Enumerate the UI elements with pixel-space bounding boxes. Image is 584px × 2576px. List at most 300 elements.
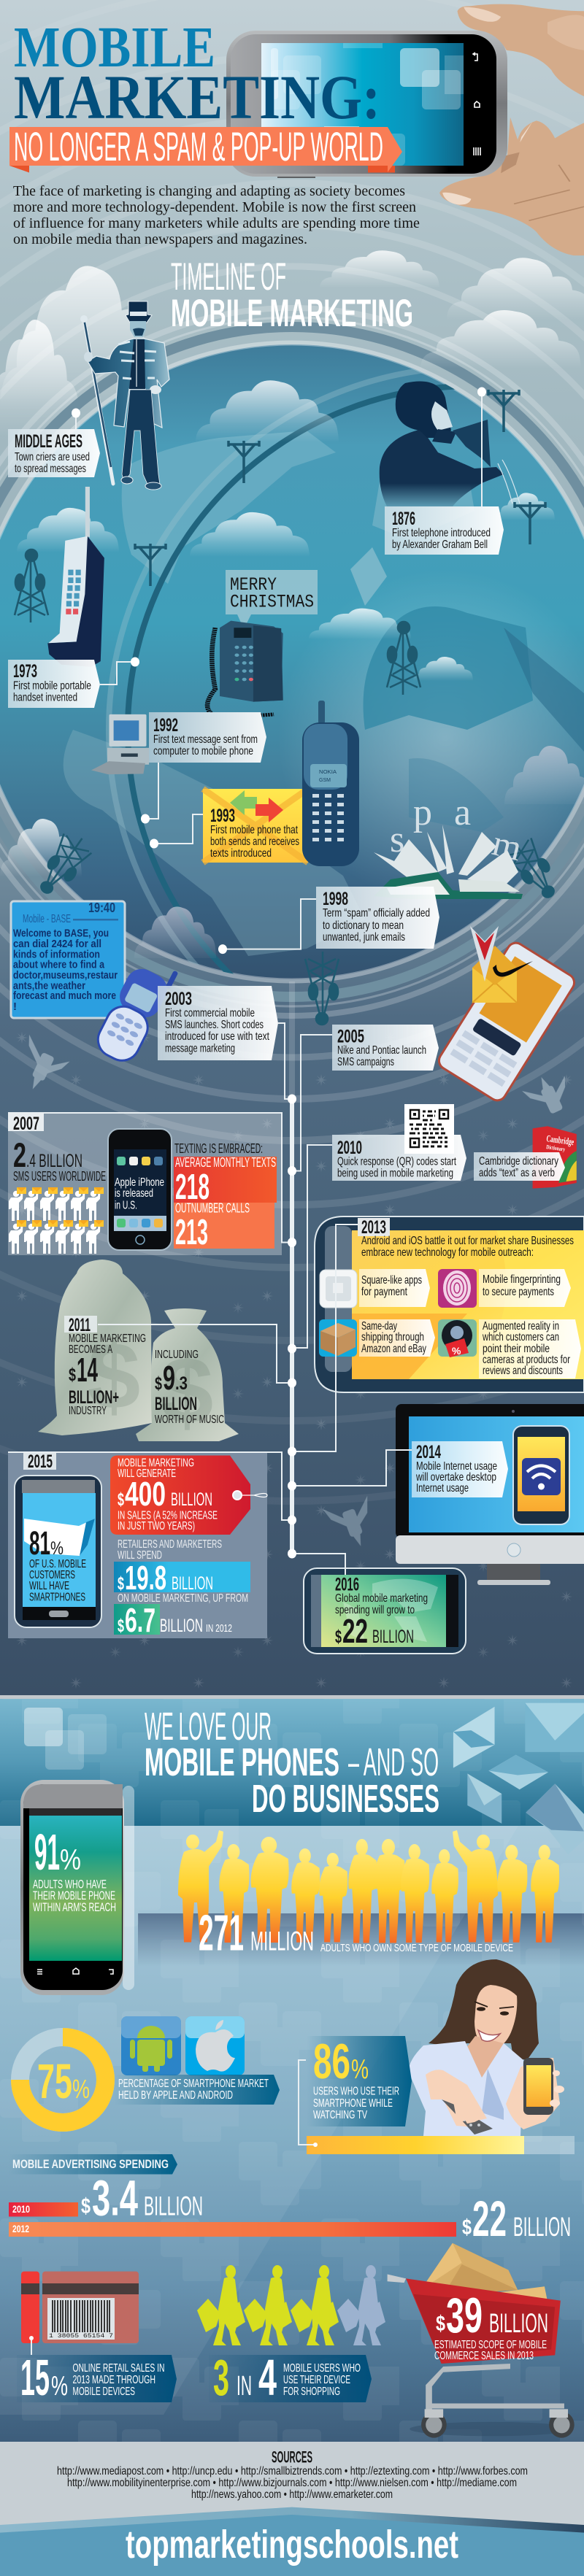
icon: blue flip phone [92, 953, 178, 1067]
text: 2011 stat: BECOMES A [69, 1343, 112, 1356]
text: augmented reality: point their mobile [483, 1343, 550, 1355]
icon: iPhone: in U.S. [115, 1200, 137, 1211]
marker line 15 percent [31, 2338, 32, 2355]
timeline dot 1998 [218, 944, 227, 954]
icon: smartphone 81%: SMARTPHONES [29, 1591, 85, 1604]
marker line 2011 [98, 1324, 292, 1383]
header: smartphone [226, 31, 507, 178]
timeline dot middle ages [72, 409, 80, 417]
text message screen: Welcome to BASE, you [13, 927, 109, 939]
speech bubble: merry christmas: CHRISTMAS [230, 591, 314, 613]
page background [0, 0, 584, 1695]
card: 1993: texts introduced [210, 847, 272, 860]
text: 2011 stat: 2011 [69, 1315, 91, 1335]
yellow bar [307, 2136, 575, 2154]
money bag left [38, 1260, 152, 1435]
stat: 15 percent: 15 [20, 2349, 50, 2406]
panel: desktop monitor 2014 [396, 1404, 584, 1585]
icon: android tile [121, 2016, 181, 2075]
icon: AR camera: % [452, 1345, 461, 1357]
intro paragraph [13, 183, 420, 247]
phone: 91 percent: % [60, 1844, 81, 1876]
phone: 91 percent: WITHIN ARM'S REACH [33, 1901, 116, 1914]
panel: 2007: TEXTING IS EMBRACED: [174, 1141, 263, 1156]
timeline dot 1876 [477, 387, 486, 397]
text message screen: kinds of information [13, 949, 100, 960]
stat: 15 percent [17, 2349, 177, 2406]
bar chart: advertising 2010: $ [81, 2194, 91, 2218]
price tag: 400 billion: MOBILE MARKETING [118, 1457, 194, 1470]
timeline dot 1993 [150, 839, 158, 848]
panel: 2016 phone: 2016 [335, 1575, 359, 1595]
stat: 3 in 4: USE THEIR DEVICE [283, 2374, 350, 2386]
timeline dot 2003 [288, 1095, 296, 1103]
stat: 3 in 4: MOBILE USERS WHO [283, 2362, 361, 2375]
icon: spam letters: p [413, 792, 432, 833]
globe [0, 340, 584, 984]
callout: 2005 [332, 1025, 439, 1071]
title: MOBILE [14, 16, 215, 80]
marker line 2003 [278, 1023, 292, 1099]
text: 2011 stat: 14 [77, 1351, 98, 1389]
stat: 3 in 4: FOR SHOPPING [283, 2386, 340, 2398]
darker clouds [134, 746, 584, 958]
icon: apple tile [185, 2016, 245, 2075]
price tag: 400 billion: $ [118, 1489, 124, 1510]
text message screen [11, 901, 125, 1018]
intro paragraph: of influence for many marketers while adults are spending more time [13, 215, 420, 231]
stat: 6.7 billion: $ [118, 1616, 124, 1636]
icon: card reader [320, 1270, 357, 1308]
callout: 1876: First telephone introduced [392, 527, 491, 539]
text message screen: can dial 2424 for all [13, 938, 101, 950]
footer with website: topmarketingschools.net [126, 2523, 458, 2567]
heading: timeline: MOBILE MARKETING [171, 292, 413, 335]
phone: 91 percent: 91 [34, 1824, 60, 1881]
icon: smartphone 81%: OF U.S. MOBILE [29, 1558, 86, 1570]
icon: open book [374, 825, 523, 899]
icon: iPhone: is released [115, 1187, 153, 1200]
sources panel [0, 2442, 584, 2576]
callout: 1998: to dictionary to mean [323, 919, 404, 932]
text message screen: ! [13, 1000, 17, 1013]
panel: 2015 [8, 1451, 292, 1639]
heading: we love our phones: DO BUSINESSES [252, 1777, 439, 1821]
title [14, 16, 380, 132]
callout: 2003 [158, 986, 278, 1060]
callout: cambridge: Dictionary [546, 1144, 566, 1153]
panel: 2016 phone: $ [335, 1627, 342, 1647]
callout: 2010: 2010 [337, 1138, 362, 1158]
icon: smartphone 81%: CUSTOMERS [29, 1569, 75, 1581]
text: 2011 stat: $ [69, 1365, 76, 1385]
background clouds [0, 250, 584, 436]
text message screen: ants,the weather [13, 979, 85, 992]
intro paragraph: on mobile media than newspapers and magazines. [13, 231, 307, 247]
text message screen: doctor,museums,restaur [13, 969, 118, 982]
text: same-day: shipping through [361, 1331, 424, 1343]
icon: spam letters [390, 792, 526, 868]
card: 1993 [203, 789, 308, 863]
icon: smartphone 81% [15, 1476, 101, 1627]
land masses [64, 431, 584, 956]
text: same-day [359, 1319, 435, 1357]
price tag: 400 billion: 400 [125, 1475, 166, 1513]
callout: 2014 [412, 1441, 508, 1497]
panel: 2016 phone: Global mobile marketing [335, 1592, 428, 1605]
stat: 3 in 4: 3 [213, 2349, 229, 2406]
callout: 1992 [149, 712, 266, 763]
text: music stat: .3 [175, 1373, 188, 1394]
donut chart 75 percent [20, 2037, 106, 2123]
stat: 271 million [199, 1905, 513, 1962]
stat: 19.8 billion [114, 1538, 250, 1597]
callout: 1973 [8, 660, 100, 708]
callout: middle ages: to spread messages [15, 463, 86, 475]
town crier figure [80, 301, 169, 490]
clouds on the globe [0, 310, 581, 877]
marker line 1993 [154, 814, 203, 844]
icon: 1973 handset [47, 487, 104, 667]
text message screen: about where to find a [13, 959, 105, 971]
text: square apps [359, 1269, 430, 1307]
marker line 2010 [292, 1145, 332, 1348]
text: music stat [155, 1349, 224, 1426]
icon: nokia phone: GSM [319, 778, 331, 783]
text: 2011 stat [64, 1315, 146, 1417]
panel: 2016 phone [304, 1568, 466, 1654]
icon: smartphone 81%: % [50, 1538, 64, 1559]
bar chart: advertising 2012 [9, 2191, 571, 2247]
callout: middle ages: MIDDLE AGES [15, 431, 82, 452]
radio towers [15, 549, 565, 1025]
icon: nokia phone [302, 701, 359, 866]
icon: credit card barcode: 1 38055 65154 7 [49, 2333, 113, 2340]
price tag: 400 billion [110, 1455, 267, 1535]
bar chart: advertising 2010: BILLION [144, 2191, 203, 2221]
marker line 2005 [292, 1035, 332, 1171]
icon: nokia phone: NOKIA [319, 770, 337, 775]
timeline dot 2016 [288, 1549, 296, 1559]
banner: market share: PERCENTAGE OF SMARTPHONE MARKET [118, 2078, 269, 2090]
marker line 1876 [481, 392, 483, 506]
timeline dot 2013 link [288, 1344, 296, 1353]
callout: 1973: First mobile portable [13, 680, 91, 692]
price tag: 400 billion: IN JUST TWO YEARS) [118, 1520, 195, 1532]
callout: 2003: introduced for use with text [165, 1030, 269, 1043]
icon: smartphone 81%: 81 [29, 1524, 50, 1562]
heading: we love our phones: WE LOVE OUR [145, 1705, 272, 1748]
heading: we love our phones: MOBILE PHONES [145, 1740, 339, 1784]
card: 1993: both sends and receives [210, 836, 299, 848]
marker line 2016 [292, 1554, 345, 1575]
sources panel: SOURCES [272, 2448, 312, 2467]
stat: 86 percent: % [351, 2054, 369, 2085]
decorative rings [0, 180, 584, 1505]
callout: 2014: will overtake desktop [415, 1471, 496, 1484]
stat: 86 percent: USERS WHO USE THEIR [313, 2086, 399, 2098]
marker dot 86 percent [313, 2143, 318, 2147]
panel: 2007 [8, 1113, 292, 1255]
panel: 2007: 2007 [13, 1114, 39, 1134]
stat: 6.7 billion [114, 1592, 248, 1639]
callout: 2014: 2014 [416, 1442, 441, 1462]
banner: mobile advertising spending: MOBILE ADVERTISING SPENDING [12, 2157, 169, 2171]
stat: 86 percent: SMARTPHONE WHILE [313, 2097, 393, 2110]
heading: we love our phones: – AND SO [348, 1740, 439, 1784]
stat: 86 percent: 86 [313, 2034, 350, 2089]
stat: 86 percent: WATCHING TV [313, 2109, 367, 2121]
marker line 1992 [145, 763, 158, 819]
callout: 1998: unwanted, junk emails [323, 931, 405, 944]
heading: we love our phones [145, 1705, 439, 1821]
money bag left: $ [88, 1322, 140, 1429]
marker line 1998 [223, 899, 316, 949]
callout: 2003: SMS launches. Short codes [165, 1019, 264, 1031]
text: augmented reality [479, 1319, 581, 1378]
donut chart 75 percent: % [72, 2074, 90, 2104]
timeline dot 2015 [288, 1515, 296, 1525]
panel: 2013 tablet [315, 1216, 584, 1392]
icon: shopping cart [388, 2243, 575, 2438]
stat: 15 percent: ONLINE RETAIL SALES IN [73, 2362, 165, 2375]
icon: shoppers [197, 2265, 385, 2345]
icon: envelopes [453, 1703, 584, 1854]
icon: spam letters: m [488, 822, 526, 868]
icon: computer [91, 714, 149, 774]
icon: phone with wifi [513, 1426, 569, 1524]
intro paragraph: more and more technology-dependent. Mobile is now the first screen [13, 199, 416, 215]
stat: 6.7 billion: BILLION [160, 1616, 203, 1636]
price tag: 400 billion: BILLION [171, 1489, 212, 1510]
star pattern [0, 1022, 584, 1693]
header: hand lower [439, 117, 584, 255]
stat: 3 in 4 [209, 2349, 372, 2406]
bar chart: advertising 2012: 2012 [12, 2223, 29, 2234]
marker line 2013 [292, 1225, 358, 1451]
text: music stat: $ [155, 1373, 162, 1394]
stat: 3 in 4: 4 [258, 2349, 277, 2406]
timeline dot 2013 [288, 1446, 296, 1457]
text message screen: forecast and much more [13, 990, 116, 1002]
stat: calls: 213 [175, 1213, 208, 1252]
icon: silver phone [436, 940, 577, 1103]
timeline dot 2014 [288, 1481, 296, 1490]
timeline dot 2011 [288, 1378, 296, 1388]
stat: calls [174, 1201, 274, 1252]
title: MARKETING: [14, 62, 380, 132]
stat: 19.8 billion: WILL SPEND [118, 1549, 162, 1562]
icon: dictionary [533, 1126, 577, 1189]
icon: AR camera [438, 1319, 477, 1357]
bar chart: advertising 2012: $ [462, 2216, 472, 2240]
phone: 91 percent: ADULTS WHO HAVE [33, 1878, 107, 1891]
icon: satellites [9, 1035, 577, 1554]
heading: timeline: TIMELINE OF [171, 255, 286, 298]
stat: 19.8 billion: BILLION [172, 1573, 213, 1594]
callout: 2010 [332, 1135, 466, 1181]
bar chart: advertising 2010: 3.4 [92, 2170, 138, 2226]
icon: fingerprint [438, 1269, 477, 1308]
callout: cambridge [474, 1126, 577, 1189]
stat: 19.8 billion: 19.8 [125, 1559, 166, 1597]
header: hand upper [458, 4, 584, 96]
text: fingerprinting: to secure payments [483, 1286, 554, 1298]
app squares decoration [24, 1708, 107, 1770]
telephone poles [134, 390, 546, 586]
callout: 1973: handset invented [13, 692, 77, 703]
stat: calls: OUTNUMBER CALLS [175, 1201, 250, 1216]
text: square apps: Square-like apps [361, 1274, 422, 1287]
marker line 2014 [292, 1450, 412, 1486]
callout: 2014: Internet usage [416, 1482, 469, 1495]
timeline dot 1992 [141, 814, 150, 823]
icon: credit card barcode [21, 2272, 139, 2343]
footer with website [0, 2507, 584, 2576]
phone: 91 percent: THEIR MOBILE PHONE [33, 1889, 115, 1902]
stat: 19.8 billion: RETAILERS AND MARKETERS [118, 1538, 222, 1551]
panel: 2007: .4 BILLION [26, 1151, 82, 1171]
section 2 background [0, 1695, 584, 2442]
callout: 2005: 2005 [337, 1026, 364, 1046]
banner: market share: HELD BY APPLE AND ANDROID [118, 2089, 233, 2102]
callout: 2003: message marketing [165, 1042, 235, 1055]
text: music stat: BILLION [155, 1394, 197, 1414]
text: same-day: Same-day [361, 1320, 397, 1333]
stat: 19.8 billion: $ [118, 1573, 124, 1594]
callout: middle ages: Town criers are used [15, 451, 90, 463]
bar chart: advertising 2010: 2010 [12, 2203, 30, 2215]
callout: 1876 [385, 506, 504, 555]
stat: 86 percent [307, 2034, 412, 2126]
speech bubble: merry christmas [226, 570, 318, 629]
text: 2011 stat: BILLION+ [69, 1387, 119, 1408]
donut chart 75 percent: 75 [37, 2054, 72, 2109]
callout: 1876: 1876 [392, 509, 415, 529]
panel: 2007: SMS USERS WORLDWIDE [13, 1169, 106, 1184]
text: square apps: for payment [361, 1286, 407, 1298]
stat: 6.7 billion: 6.7 [125, 1601, 155, 1639]
panel: 2016 phone: 22 [342, 1612, 368, 1650]
marker line 1973 [100, 662, 135, 685]
text message screen: Mobile - BASE [23, 913, 71, 925]
panel: 2007: 2 [13, 1135, 26, 1174]
sources panel: http://news.yahoo.com • http://www.emarketer.com [191, 2488, 393, 2501]
silhouettes of people [178, 1830, 559, 1943]
callout: 2010: being used in mobile marketing [337, 1168, 453, 1179]
phone: 91 percent [20, 1780, 134, 1995]
money bag right: $ [161, 1337, 213, 1443]
callout: 1992: computer to mobile phone [153, 745, 253, 757]
panel: 2013 tablet: 2013 [361, 1217, 386, 1238]
stat: 271 million: MILLION [250, 1927, 314, 1956]
icon: spam letters: s [390, 819, 404, 860]
callout: 1992: First text message sent from [153, 733, 258, 746]
banner: market share [114, 2075, 280, 2105]
icon: envelope and logos [470, 926, 533, 1003]
timeline dot 2007 [288, 1238, 296, 1247]
callout: 2014: Mobile Internet usage [416, 1460, 497, 1473]
callout: 2005: Nike and Pontiac launch [337, 1044, 426, 1057]
callout: middle ages [8, 429, 100, 477]
stat: 15 percent: % [51, 2371, 68, 2402]
icon: car phone [207, 621, 283, 716]
central timeline line [289, 982, 295, 1554]
intro paragraph: The face of marketing is changing and adapting as society becomes [13, 183, 405, 199]
icon: QR code [404, 1104, 454, 1154]
price tag: 400 billion: WILL GENERATE [118, 1468, 176, 1480]
phone screen [261, 43, 464, 166]
panel: 2015: 2015 [28, 1451, 53, 1472]
icon: shopping cart: 39 [446, 2288, 483, 2343]
stat: monthly texts [174, 1155, 277, 1207]
orbit arcs [106, 369, 456, 974]
callout: 1992: 1992 [153, 715, 178, 736]
callout: 1973: 1973 [13, 661, 37, 682]
callout: 2003: First commercial mobile [165, 1007, 255, 1019]
text: 2011 stat: INDUSTRY [69, 1405, 107, 1417]
stat: 3 in 4: IN [237, 2371, 252, 2402]
stat: monthly texts: AVERAGE MONTHLY TEXTS [175, 1155, 276, 1170]
text: music stat: WORTH OF MUSIC [155, 1414, 224, 1426]
icon: people with envelopes [9, 1190, 101, 1254]
stat: 6.7 billion: ON MOBILE MARKETING, UP FROM [118, 1592, 248, 1605]
callout: 1998: 1998 [323, 889, 348, 909]
callout: 2005: SMS campaigns [337, 1056, 394, 1068]
banner: mobile advertising spending [9, 2154, 177, 2175]
icon: shipping box [319, 1319, 357, 1357]
text: music stat: 9 [163, 1359, 175, 1397]
callout: cambridge: adds “text” as a verb [479, 1167, 555, 1179]
icon: iPhone: Apple iPhone [115, 1176, 164, 1189]
stat: 15 percent: 2013 MADE THROUGH [73, 2374, 155, 2386]
stat: 15 percent: MOBILE DEVICES [73, 2386, 135, 2398]
text: 2011 stat: MOBILE MARKETING [69, 1333, 146, 1345]
card: 1993: First mobile phone that [210, 824, 298, 836]
text: same-day: Amazon and eBay [361, 1343, 426, 1355]
icon: iPhone [108, 1129, 172, 1250]
bar chart: advertising 2012: 22 [472, 2191, 507, 2247]
callout: 2010: Quick response (QR) codes start [337, 1156, 456, 1168]
stat: 6.7 billion: IN 2012 [206, 1622, 232, 1635]
marker line middle ages [75, 413, 77, 429]
callout: 1876: by Alexander Graham Bell [392, 539, 488, 551]
icon: smartphone 81%: WILL HAVE [29, 1580, 69, 1592]
marker dot 15 percent [29, 2336, 34, 2340]
icon: swap arrows [230, 790, 283, 822]
panel: 2016 phone: spending will grow to [335, 1604, 415, 1616]
callout: 2003: 2003 [165, 989, 192, 1009]
money bag right [136, 1308, 239, 1443]
marker line 86 percent [299, 2060, 315, 2145]
panel: 2016 phone: BILLION [372, 1627, 414, 1647]
price tag: 400 billion: IN SALES (A 52% INCREASE [118, 1509, 218, 1522]
speech bubble: merry christmas: MERRY [230, 574, 277, 595]
bell figure [380, 381, 520, 506]
heading: timeline [171, 255, 413, 335]
woman with phone [409, 1959, 564, 2136]
timeline dot 2005 [288, 1166, 296, 1176]
card: 1993: 1993 [210, 806, 235, 826]
stat: monthly texts: 218 [175, 1168, 210, 1207]
text: music stat: INCLUDING [155, 1349, 199, 1361]
text: fingerprinting [479, 1269, 571, 1307]
icon: spam letters: a [454, 792, 471, 833]
callout: 1998: Term “spam” officially added [323, 907, 430, 919]
timeline dot 1973 [131, 657, 139, 667]
bar chart: advertising 2010 [9, 2170, 203, 2226]
icon: shopping cart: $ [436, 2312, 445, 2336]
